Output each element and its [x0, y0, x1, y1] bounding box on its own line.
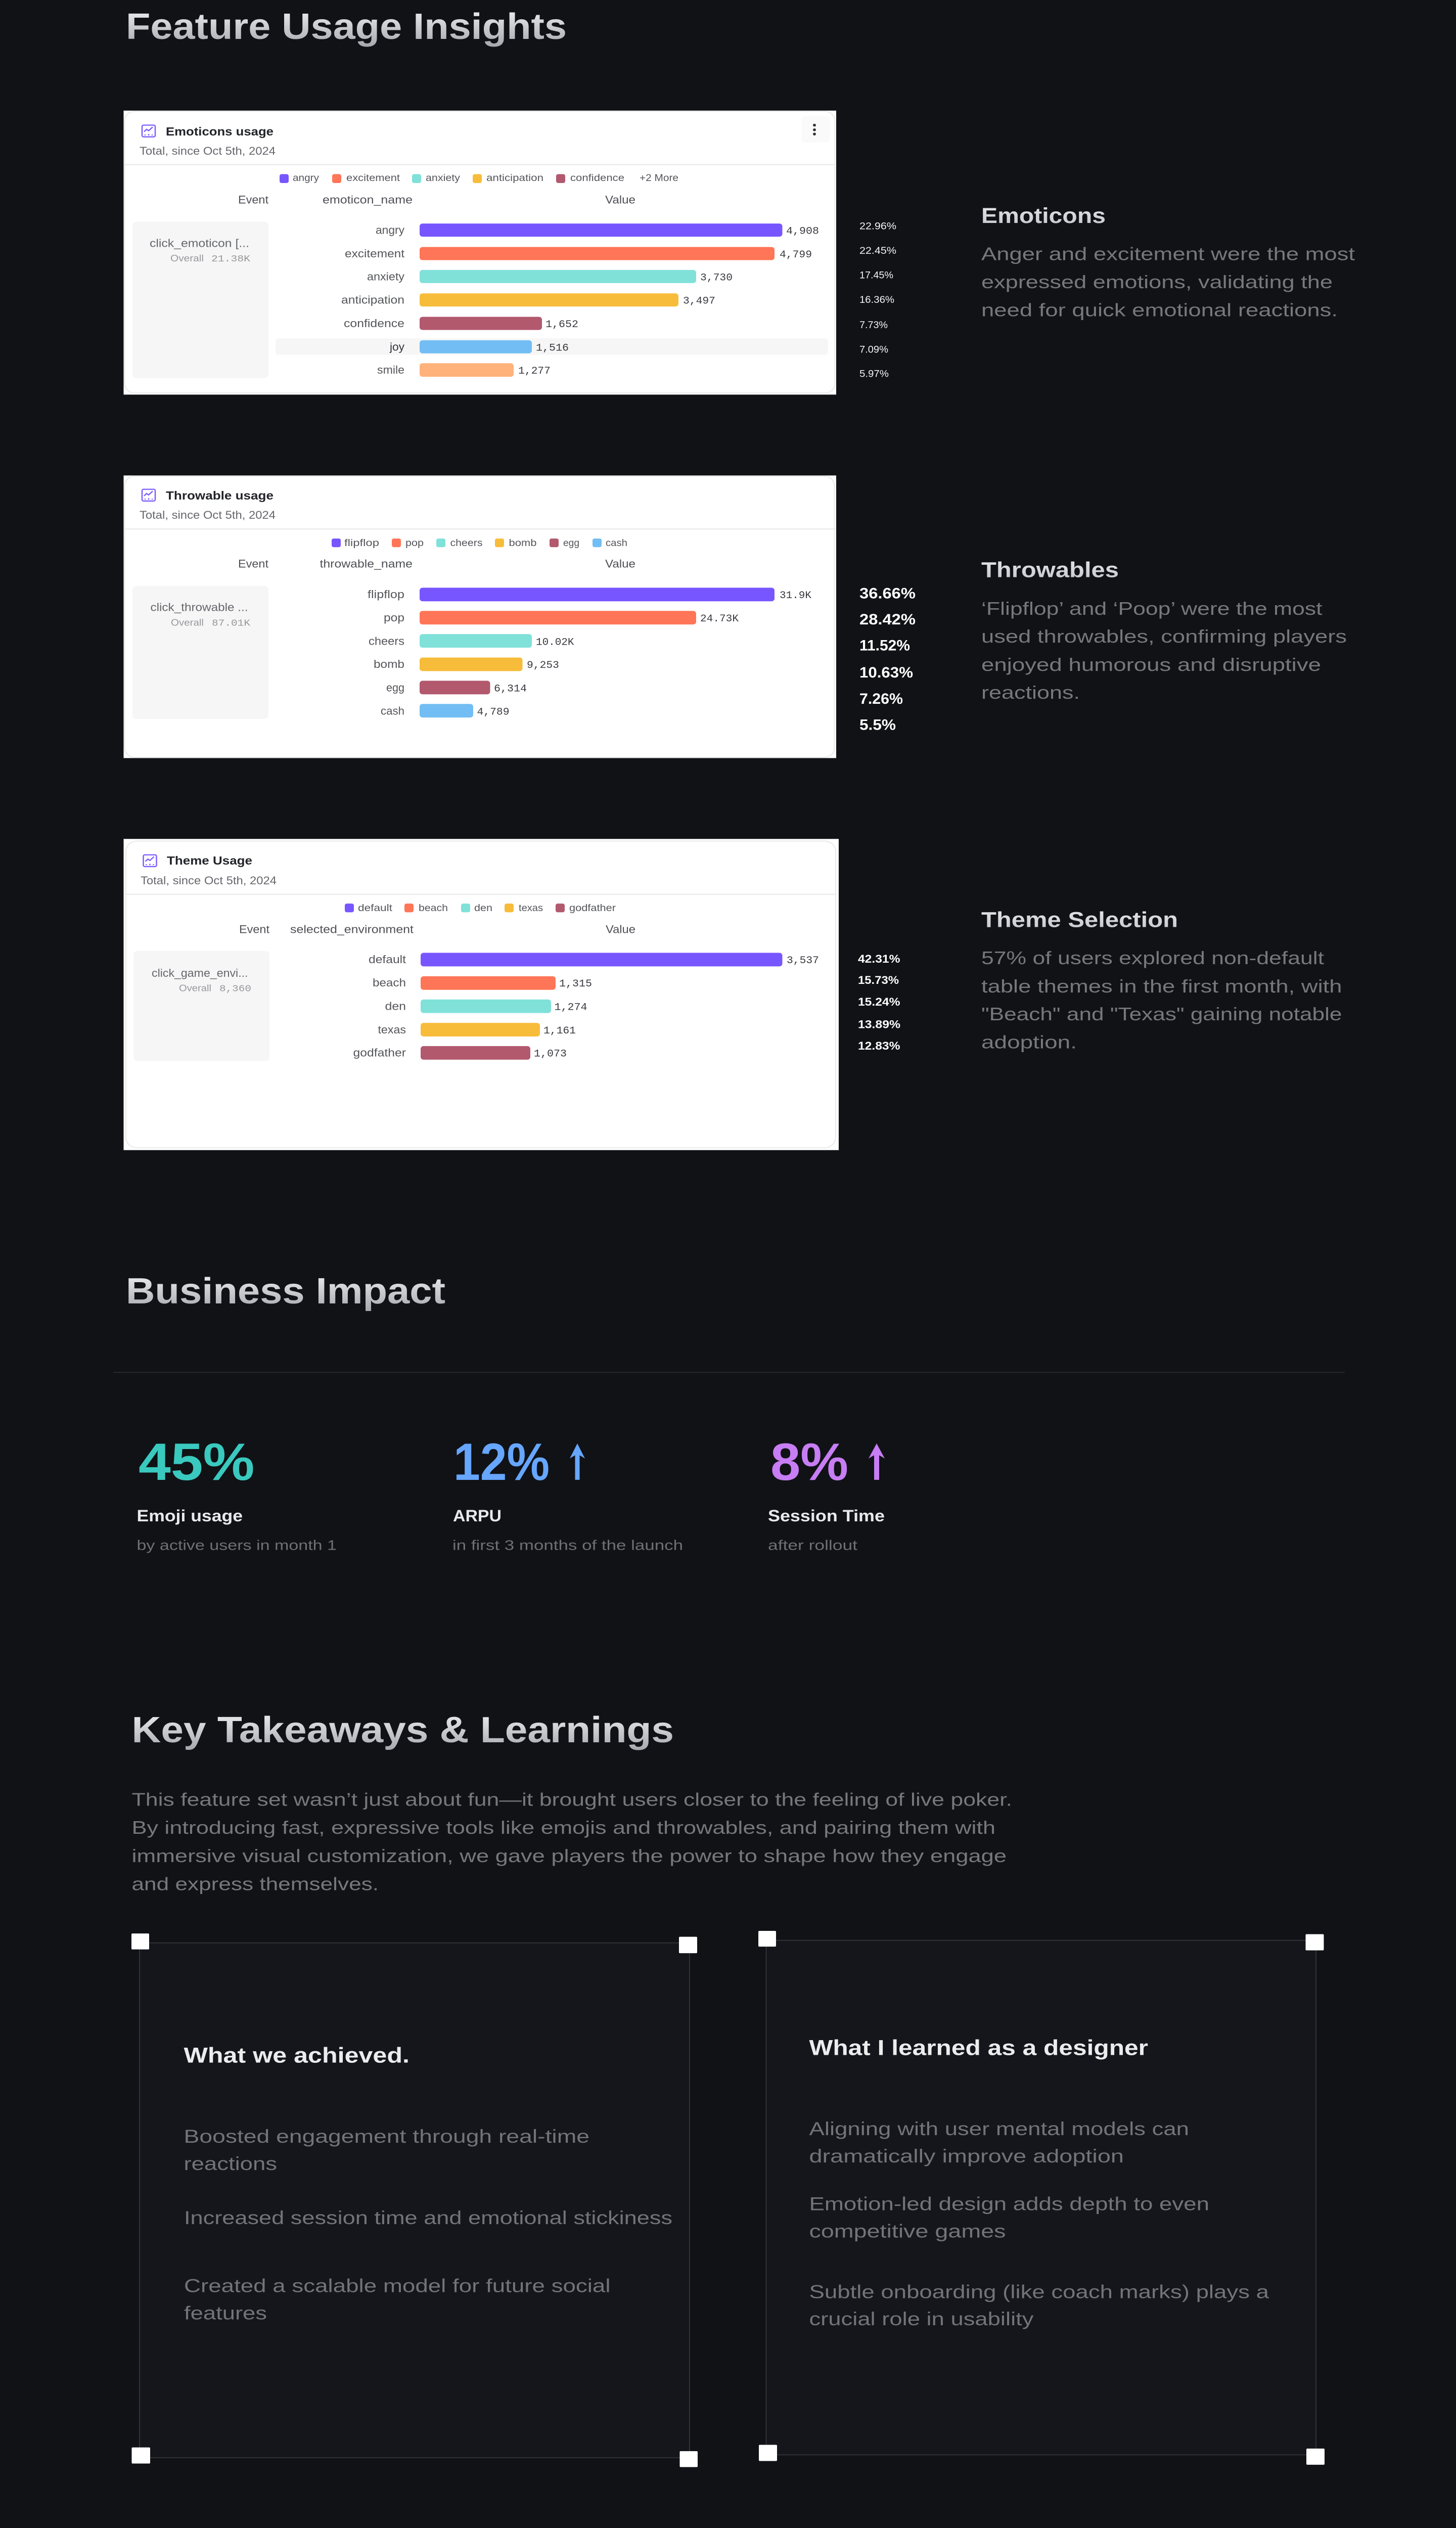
percentages: throwables: 28.42%	[859, 611, 916, 628]
percentages: emoticons: 17.45%	[859, 270, 893, 281]
icon: chart	[142, 125, 155, 137]
text block: throwables: enjoyed humorous and disruptive	[981, 654, 1321, 675]
text block: summary	[131, 1789, 1012, 1894]
bar chart: bomb	[374, 658, 404, 670]
column headers: Event	[238, 193, 269, 206]
card heading: What we achieved.	[184, 2044, 410, 2067]
list item: reactions	[184, 2153, 277, 2174]
percentages: emoticons	[859, 221, 896, 379]
legend: angry	[293, 172, 320, 184]
text block: theme selection	[981, 908, 1342, 1052]
list item: Increased session time and emotional stickiness	[184, 2207, 672, 2229]
card heading: What I learned as a designer	[809, 2036, 1148, 2060]
legend: anxiety	[426, 172, 461, 184]
column headers: throwable_name	[320, 557, 413, 570]
bar chart: beach	[373, 976, 406, 989]
bar chart: anticipation	[341, 293, 404, 306]
bar chart: 1,652	[545, 319, 578, 331]
percentages: throwables: 10.63%	[859, 664, 913, 681]
list item	[809, 2194, 1209, 2242]
event cell: Overall	[171, 618, 204, 628]
bar chart: angry	[376, 223, 404, 236]
event cell: click_emoticon [...	[150, 237, 249, 249]
bar chart: 3,497	[683, 295, 715, 307]
percentages: emoticons: 7.09%	[859, 344, 888, 355]
event cell: 21.38K	[211, 254, 250, 264]
event cell: click_game_envi...	[152, 967, 248, 979]
text block: summary: This feature set wasn’t just about fun—it brought users closer to the feeling of live poker.	[131, 1789, 1012, 1810]
bar chart: confidence	[344, 317, 404, 330]
bar chart: pop	[384, 611, 404, 624]
bar chart: anxiety	[367, 270, 404, 283]
column headers	[238, 557, 635, 570]
panel: throwable usage chart	[123, 475, 836, 758]
chart title: Emoticons usage	[166, 125, 274, 139]
text block: emoticons: Anger and excitement were the most	[981, 244, 1355, 264]
text block: throwables: ‘Flipflop’ and ‘Poop’ were the most	[981, 598, 1323, 619]
metric: emoji usage	[136, 1432, 337, 1553]
percentages: throwables	[859, 585, 916, 733]
panel: theme usage chart	[123, 839, 839, 1150]
event cell: 8,360	[219, 983, 251, 994]
percentages: themes: 15.24%	[858, 996, 900, 1008]
percentages: themes: 12.83%	[858, 1040, 900, 1052]
metric: ARPU: 12%	[453, 1432, 550, 1491]
icon: chart	[142, 489, 155, 501]
column headers: Value	[606, 923, 635, 935]
arrow: up	[570, 1443, 585, 1480]
heading: Feature Usage Insights: Feature Usage Insights	[126, 6, 567, 47]
text block: summary: immersive visual customization, we gave players the power to shape how they engage	[131, 1845, 1007, 1866]
bar chart: 6,314	[494, 683, 527, 695]
bar chart: 4,799	[780, 249, 812, 261]
chart title: Throwable usage	[166, 489, 274, 503]
bar chart: 1,274	[554, 1002, 587, 1013]
column headers: Value	[605, 557, 635, 570]
list item: dramatically improve adoption	[809, 2146, 1124, 2167]
metric: session time: after rollout	[768, 1538, 857, 1553]
list item: Created a scalable model for future social	[184, 2276, 611, 2296]
text block: emoticons: need for quick emotional reactions.	[981, 300, 1338, 320]
bar chart: 1,073	[534, 1048, 567, 1060]
metric: ARPU: ARPU	[453, 1507, 502, 1525]
legend: egg	[563, 538, 579, 549]
metric: emoji usage: Emoji usage	[136, 1507, 243, 1525]
event cell: Overall	[170, 254, 204, 264]
legend: cash	[606, 538, 627, 549]
list item: features	[184, 2303, 267, 2324]
bar chart: 31.9K	[780, 590, 811, 602]
legend: texas	[519, 903, 543, 914]
percentages: themes: 13.89%	[858, 1018, 900, 1030]
column headers	[239, 923, 635, 935]
handle: top left	[131, 1933, 149, 1950]
bar chart: 3,730	[700, 272, 733, 284]
percentages: throwables: 11.52%	[859, 637, 910, 654]
metric: session time	[768, 1432, 885, 1553]
bar chart: excitement	[345, 247, 405, 260]
chart title: Theme Usage	[167, 854, 252, 868]
list item: crucial role in usability	[809, 2309, 1034, 2330]
bar chart: default	[369, 953, 406, 966]
bar chart: cheers	[369, 635, 404, 647]
panel: what we achieved	[131, 1933, 698, 2467]
bar chart: 3,537	[787, 955, 819, 967]
text block: throwables: reactions.	[981, 682, 1080, 703]
percentages: throwables: 5.5%	[859, 716, 896, 733]
text block: throwables: used throwables, confirming players	[981, 626, 1347, 647]
percentages: themes	[858, 953, 900, 1052]
bar chart: 1,277	[518, 365, 551, 377]
handle: top right	[679, 1937, 697, 1953]
event cell	[132, 221, 268, 378]
percentages: themes: 15.73%	[858, 974, 899, 986]
percentages: throwables: 7.26%	[859, 690, 903, 707]
metric: ARPU	[452, 1432, 683, 1553]
bar chart	[353, 953, 819, 1060]
handle: top right	[1305, 1934, 1324, 1951]
icon: more menu	[801, 116, 830, 143]
handle: bottom right	[1306, 2449, 1325, 2465]
event cell: click_throwable ...	[151, 601, 248, 614]
metric: emoji usage: by active users in month 1	[136, 1538, 337, 1553]
percentages: themes: 42.31%	[858, 953, 900, 965]
bar chart: 9,253	[527, 660, 559, 671]
percentages: emoticons: 22.96%	[859, 221, 896, 232]
percentages: emoticons: 5.97%	[859, 369, 889, 379]
legend: excitement	[346, 172, 400, 184]
metric: emoji usage: 45%	[139, 1432, 254, 1491]
bar chart: 1,516	[536, 342, 569, 354]
bar chart: flipflop	[368, 588, 404, 601]
legend: anticipation	[486, 172, 543, 184]
legend: den	[474, 903, 492, 914]
text block: theme selection: 57% of users explored non-default	[981, 948, 1325, 968]
event cell: 87.01K	[212, 618, 250, 628]
legend	[345, 903, 616, 914]
percentages: emoticons: 22.45%	[859, 246, 896, 256]
heading: Business Impact: Business Impact	[126, 1270, 445, 1311]
event cell: Overall	[179, 983, 211, 994]
legend: godfather	[569, 903, 616, 914]
event cell	[133, 951, 269, 1061]
legend: +2 More	[640, 172, 678, 184]
list item	[809, 2282, 1269, 2330]
column headers: Value	[605, 193, 635, 206]
bar chart: texas	[378, 1023, 406, 1036]
legend	[332, 538, 627, 549]
percentages: throwables: 36.66%	[859, 585, 916, 602]
icon: chart	[144, 855, 157, 867]
bar chart: 10.02K	[536, 637, 574, 648]
arrow: up	[869, 1443, 885, 1480]
metric: session time: 8%	[770, 1432, 848, 1491]
bar chart: cash	[381, 704, 404, 717]
legend: pop	[405, 538, 424, 549]
bar chart: 24.73K	[700, 613, 739, 625]
bar chart: 4,789	[477, 706, 509, 718]
chart subtitle: Total, since Oct 5th, 2024	[140, 509, 276, 521]
handle: bottom left	[759, 2445, 777, 2461]
legend: beach	[419, 903, 448, 914]
column headers: selected_environment	[290, 923, 414, 935]
list item	[184, 2276, 611, 2324]
heading: Key Takeaways & Learnings: Key Takeaways & Learnings	[131, 1709, 674, 1750]
text block: emoticons: expressed emotions, validating the	[981, 272, 1333, 292]
bar chart: 1,315	[559, 978, 592, 990]
text block: summary: By introducing fast, expressive tools like emojis and throwables, and pairing them with	[131, 1817, 995, 1838]
text block: theme selection: Theme Selection	[981, 908, 1178, 932]
bar chart: 1,161	[543, 1025, 576, 1037]
legend: flipflop	[344, 538, 379, 549]
chart subtitle: Total, since Oct 5th, 2024	[140, 145, 276, 157]
legend: cheers	[450, 538, 482, 549]
list item: competitive games	[809, 2221, 1006, 2242]
text block: theme selection: table themes in the first month, with	[981, 976, 1342, 997]
legend: default	[358, 903, 392, 914]
bar chart	[276, 223, 828, 377]
bar chart: smile	[377, 364, 404, 376]
list item	[184, 2126, 589, 2174]
chart subtitle: Total, since Oct 5th, 2024	[141, 874, 277, 887]
bar chart: den	[385, 1000, 406, 1012]
column headers: Event	[239, 923, 270, 935]
legend: confidence	[570, 172, 624, 184]
text block: throwables	[981, 558, 1347, 703]
handle: bottom left	[131, 2448, 150, 2464]
handle: bottom right	[679, 2451, 698, 2467]
handle: top left	[758, 1931, 776, 1947]
column headers: emoticon_name	[323, 193, 413, 206]
column headers	[238, 193, 635, 206]
list item: Emotion-led design adds depth to even	[809, 2194, 1209, 2215]
text block: throwables: Throwables	[981, 558, 1119, 582]
bar chart	[368, 588, 811, 718]
panel: what I learned as a designer	[758, 1931, 1325, 2465]
text block: emoticons	[981, 204, 1355, 320]
list item	[809, 2119, 1189, 2167]
list item: Boosted engagement through real-time	[184, 2126, 589, 2147]
text block: theme selection: "Beach" and "Texas" gaining notable	[981, 1004, 1342, 1024]
legend	[280, 172, 678, 184]
list item: Aligning with user mental models can	[809, 2119, 1189, 2140]
column headers: Event	[238, 557, 269, 570]
text block: theme selection: adoption.	[981, 1032, 1077, 1052]
percentages: emoticons: 16.36%	[859, 294, 894, 305]
text block: emoticons: Emoticons	[981, 204, 1106, 228]
metric: session time: Session Time	[768, 1507, 885, 1525]
legend: bomb	[509, 538, 537, 549]
panel: emoticons usage chart	[123, 111, 836, 394]
text block: summary: and express themselves.	[131, 1874, 379, 1894]
bar chart: 4,908	[786, 225, 819, 237]
bar chart: joy	[389, 340, 404, 353]
percentages: emoticons: 7.73%	[859, 320, 888, 331]
list item: Subtle onboarding (like coach marks) plays a	[809, 2282, 1269, 2303]
event cell	[132, 586, 268, 719]
metric: ARPU: in first 3 months of the launch	[452, 1538, 683, 1553]
bar chart: egg	[386, 681, 404, 694]
bar chart: godfather	[353, 1046, 406, 1059]
